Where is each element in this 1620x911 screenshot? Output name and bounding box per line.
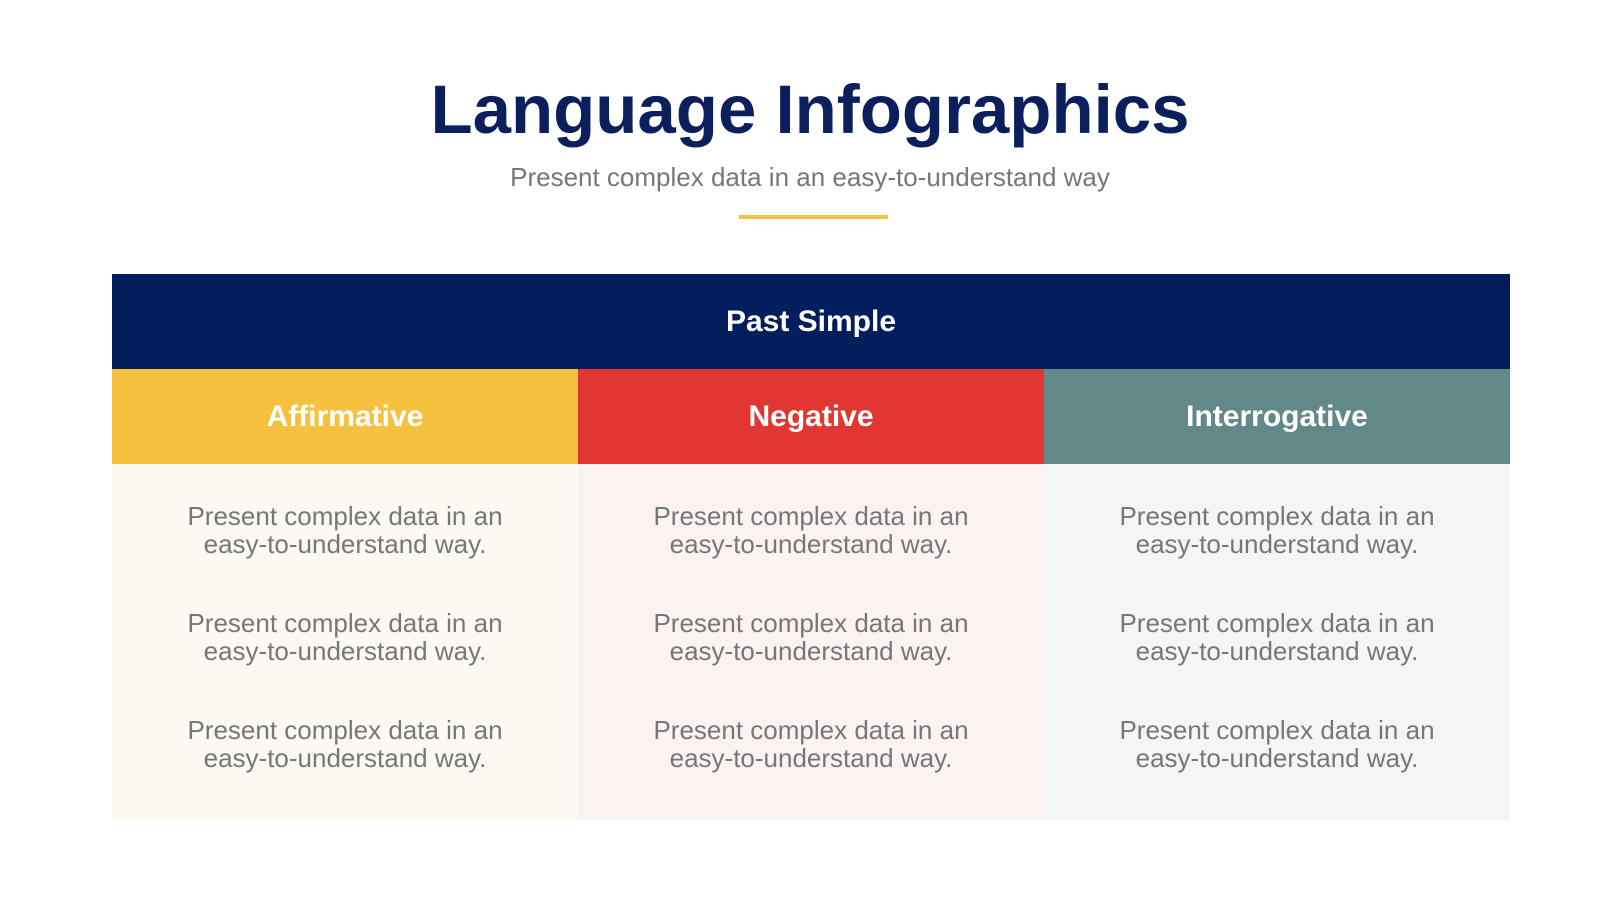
text row 3: Present complex data in an [653, 715, 969, 745]
text row 3: Present complex data in an [1119, 715, 1435, 745]
text row 3: Present complex data in an [187, 715, 503, 745]
text row 2: Present complex data in an [187, 608, 503, 638]
column header: Affirmative: Affirmative [267, 400, 423, 432]
text row 3 [1119, 715, 1435, 773]
text row 1: Present complex data in an [653, 501, 969, 531]
column header: Interrogative [1044, 369, 1510, 464]
subtitle: Present complex data in an easy-to-understand way [510, 162, 1110, 192]
text row 1 [653, 501, 969, 559]
text row 3 [653, 715, 969, 773]
table header: Past Simple: Past Simple [726, 304, 896, 338]
column body: Affirmative [112, 464, 578, 820]
text row 2: Present complex data in an [653, 608, 969, 638]
column header: Interrogative: Interrogative [1186, 400, 1368, 432]
table [112, 274, 1510, 820]
column header: Negative: Negative [748, 400, 874, 432]
text row 3: easy-to-understand way. [670, 743, 952, 773]
text row 2: easy-to-understand way. [204, 636, 486, 666]
text row 1 [1119, 501, 1435, 559]
text row 3: easy-to-understand way. [204, 743, 486, 773]
text row 3 [187, 715, 503, 773]
text row 1: easy-to-understand way. [1136, 529, 1418, 559]
text row 1: easy-to-understand way. [670, 529, 952, 559]
text row 1: easy-to-understand way. [204, 529, 486, 559]
column header: Affirmative [112, 369, 578, 464]
text row 2: easy-to-understand way. [670, 636, 952, 666]
text row 1: Present complex data in an [187, 501, 503, 531]
text row 2: Present complex data in an [1119, 608, 1435, 638]
title: Language Infographics [430, 71, 1190, 148]
text row 1 [187, 501, 503, 559]
column body: Negative [578, 464, 1044, 820]
text row 2: easy-to-understand way. [1136, 636, 1418, 666]
text row 2 [187, 608, 503, 666]
accent underline [739, 215, 888, 219]
text row 2 [1119, 608, 1435, 666]
text row 3: easy-to-understand way. [1136, 743, 1418, 773]
text row 1: Present complex data in an [1119, 501, 1435, 531]
column body: Interrogative [1044, 464, 1510, 820]
text row 2 [653, 608, 969, 666]
table header: Past Simple [112, 274, 1510, 369]
column header: Negative [578, 369, 1044, 464]
